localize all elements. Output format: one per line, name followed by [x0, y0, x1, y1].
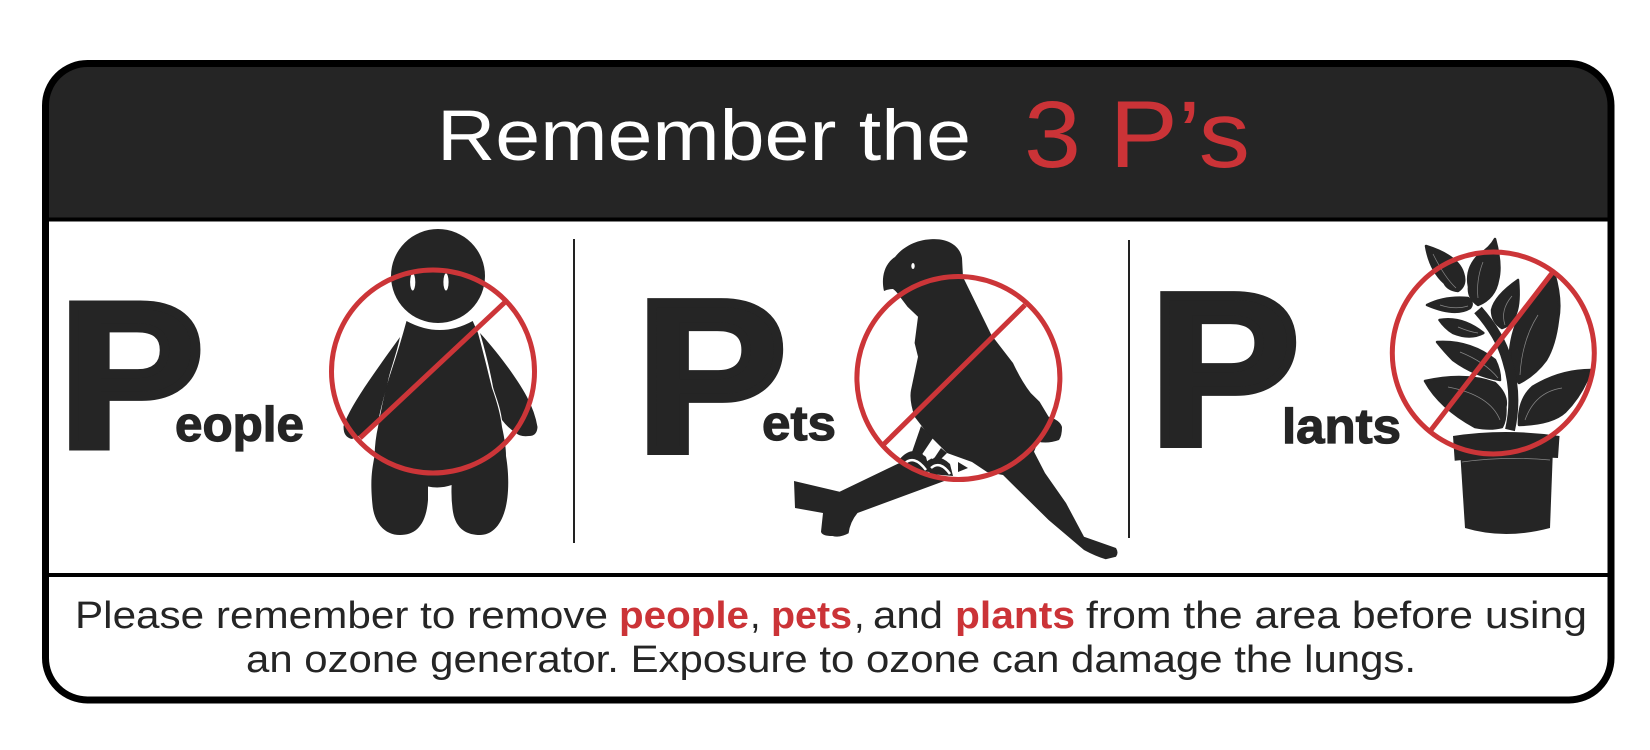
footer text: pets — [771, 595, 852, 637]
icon: parrot on branch — [794, 239, 1118, 559]
footer text — [75, 595, 1587, 681]
icon: no symbol — [332, 270, 534, 473]
divider — [1128, 240, 1130, 538]
big letter P: P — [1150, 249, 1299, 490]
big letter P: P — [637, 256, 786, 497]
footer text: plants — [955, 595, 1075, 637]
icon: no symbol — [1392, 252, 1594, 454]
panel: pets — [637, 239, 1118, 559]
title: 3 P’s — [1024, 82, 1250, 188]
icon: person — [344, 229, 538, 535]
leaf veins — [1433, 254, 1562, 462]
icon: potted plant — [1425, 239, 1591, 534]
flower pot — [1460, 456, 1553, 534]
word: eople: eople — [175, 398, 304, 452]
title: Remember the — [437, 97, 971, 176]
panel: plants — [1150, 239, 1594, 534]
panel: people — [60, 229, 538, 535]
word: ets: ets — [762, 397, 836, 451]
footer text: , — [750, 595, 761, 637]
footer text: , — [854, 595, 865, 637]
bird feet — [899, 426, 987, 476]
footer text: an ozone generator. Exposure to ozone can damage the lungs. — [246, 639, 1416, 681]
footer text: and — [873, 595, 943, 637]
header band — [46, 64, 1611, 220]
footer text: from the area before using — [1086, 595, 1587, 637]
footer text: Please remember to remove — [75, 595, 608, 637]
icon: no symbol — [857, 276, 1060, 480]
big letter P: P — [60, 261, 203, 490]
footer text: people — [619, 595, 749, 637]
title — [437, 82, 1250, 188]
divider — [573, 239, 575, 543]
word: lants: lants — [1282, 400, 1401, 454]
